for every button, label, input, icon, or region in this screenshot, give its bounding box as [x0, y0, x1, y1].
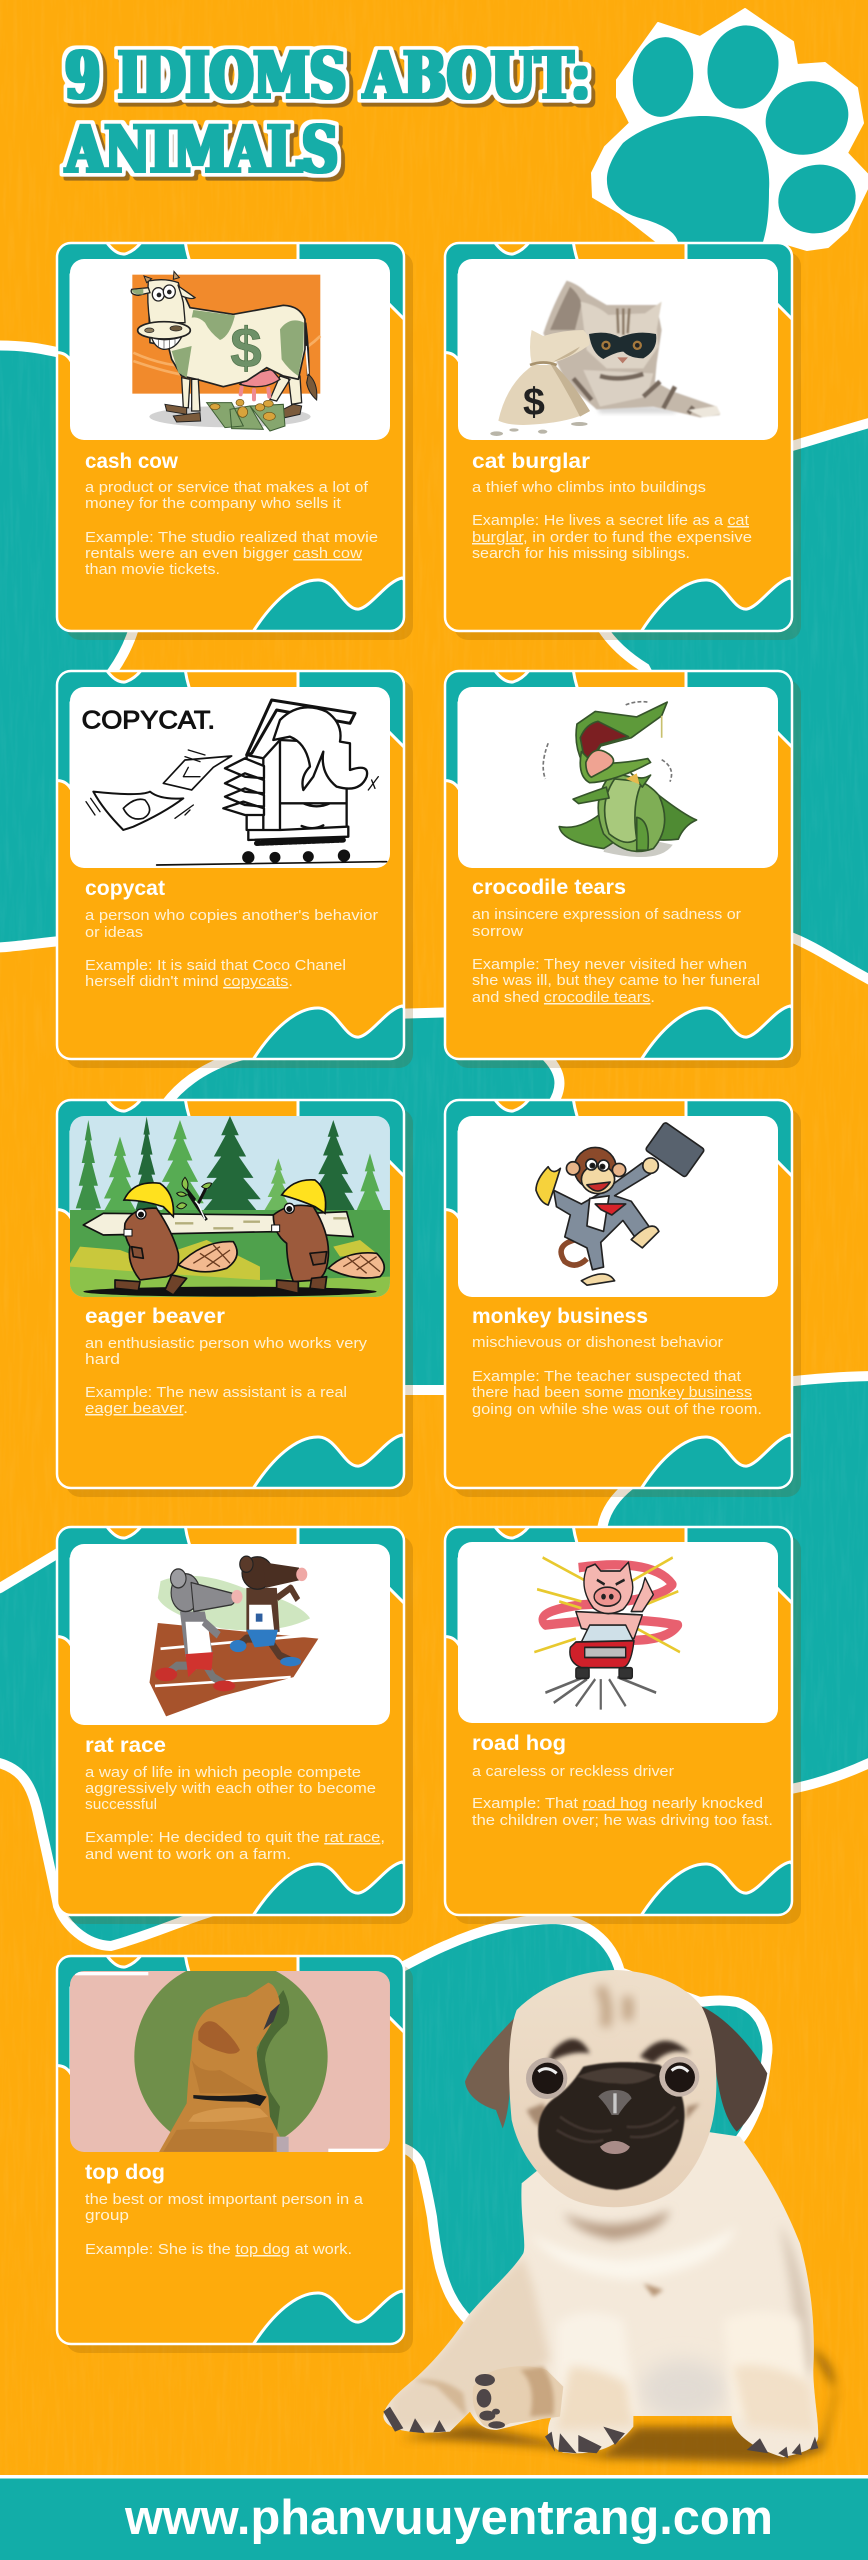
definition and example [85, 479, 378, 578]
image area [458, 687, 778, 868]
definition and example [472, 906, 760, 1006]
panel: top dog [54, 1953, 413, 2353]
definition and example: Example: The studio realized that movie [85, 529, 378, 546]
definition and example: aggressively with each other to become [85, 1780, 376, 1797]
panel: cat burglar [442, 240, 801, 640]
illustration: monkey with briefcase [536, 1122, 705, 1285]
card frame [442, 240, 801, 640]
definition and example: a product or service that makes a lot of [85, 479, 369, 496]
definition and example: hard [85, 1351, 120, 1368]
definition and example: eager beaver . [85, 1400, 188, 1417]
pug right ear [698, 2005, 767, 2132]
card frame [54, 1953, 413, 2353]
card frame [54, 1097, 413, 1497]
panel: monkey business [442, 1097, 801, 1497]
definition and example: group [85, 2207, 129, 2224]
image area [458, 259, 778, 440]
blob: behind pug [400, 1919, 767, 2322]
card frame [54, 668, 413, 1068]
pug mouth [600, 2141, 630, 2154]
illustration: dog looking up [70, 1960, 390, 2154]
definition and example [85, 907, 378, 990]
title line 2: ANIMALS [65, 112, 338, 188]
definition and example: an insincere expression of sadness or [472, 906, 741, 923]
definition and example: than movie tickets. [85, 561, 220, 578]
definition and example: there had been some monkey business [472, 1384, 752, 1401]
blob: lower right [602, 1376, 868, 1790]
definition and example [472, 1763, 773, 1829]
icon: paw print [592, 9, 868, 250]
definition and example: or ideas [85, 924, 143, 941]
definition and example: successful [85, 1796, 157, 1813]
image area [70, 687, 390, 868]
paw white outline [592, 9, 868, 250]
image area [70, 1544, 390, 1725]
background teal blobs [0, 345, 868, 2322]
website URL: www.phanvuuyentrang.com [124, 2491, 773, 2545]
definition and example: a thief who climbs into buildings [472, 479, 706, 496]
definition and example: going on while she was out of the room. [472, 1401, 762, 1418]
pug hind foot [473, 2366, 563, 2429]
image area [70, 259, 390, 440]
image area [458, 1542, 778, 1723]
card frame [54, 1524, 413, 1924]
pug shadow [400, 2347, 837, 2463]
panel: crocodile tears [442, 668, 801, 1068]
heading: cash cow: cash cow [85, 450, 179, 473]
definition and example: the children over; he was driving too fast. [472, 1812, 773, 1829]
image area [458, 1116, 778, 1297]
heading: monkey business: monkey business [472, 1305, 648, 1328]
title [65, 38, 590, 188]
heading: cat burglar: cat burglar [472, 450, 590, 473]
definition and example: Example: It is said that Coco Chanel [85, 957, 346, 974]
footer band [0, 2475, 868, 2560]
paw main pad [607, 116, 769, 242]
definition and example: Example: That road hog nearly knocked [472, 1795, 763, 1812]
definition and example: she was ill, but they came to her funeral [472, 972, 760, 989]
card frame [442, 1097, 801, 1497]
pug left ear [465, 2008, 527, 2128]
title line 1: 9 IDIOMS ABOUT: [65, 38, 590, 114]
definition and example [472, 479, 752, 562]
panel: road hog [442, 1524, 801, 1924]
card frame [442, 668, 801, 1068]
heading: eager beaver: eager beaver [85, 1305, 225, 1328]
pug muzzle [538, 2062, 685, 2190]
definition and example [472, 1334, 762, 1418]
blob: lower left [0, 1552, 210, 1946]
panel: eager beaver [54, 1097, 413, 1497]
definition and example: Example: The new assistant is a real [85, 1384, 347, 1401]
paw toes [628, 17, 863, 242]
definition and example: sorrow [472, 923, 523, 940]
illustration: cat on photocopier [82, 700, 387, 865]
definition and example: a person who copies another's behavior [85, 907, 378, 924]
definition and example: rentals were an even bigger cash cow [85, 545, 362, 562]
blob: upper right [590, 420, 868, 985]
definition and example: Example: The teacher suspected that [472, 1368, 742, 1385]
definition and example: a way of life in which people compete [85, 1764, 361, 1781]
illustration: cow: $ [230, 318, 262, 381]
pug head [509, 1970, 716, 2207]
illustration: pig driving a car [534, 1557, 680, 1710]
definition and example: Example: He lives a secret life as a cat [472, 512, 750, 529]
heading: rat race: rat race [85, 1734, 166, 1757]
pug nails [383, 2407, 818, 2458]
definition and example: and shed crocodile tears . [472, 989, 655, 1006]
definition and example: burglar , in order to fund the expensive [472, 529, 752, 546]
definition and example: Example: She is the top dog at work. [85, 2241, 352, 2258]
illustration: beavers carrying a log [70, 1116, 392, 1297]
illustration: cat on photocopier: COPYCAT. [82, 708, 215, 735]
definition and example: an enthusiastic person who works very [85, 1335, 368, 1352]
definition and example: Example: They never visited her when [472, 956, 747, 973]
card frame [54, 240, 413, 640]
definition and example: Example: He decided to quit the rat race , [85, 1829, 385, 1846]
definition and example [85, 1335, 368, 1417]
definition and example: the best or most important person in a [85, 2191, 364, 2208]
definition and example: herself didn't mind copycats . [85, 973, 293, 990]
panel: rat race [54, 1524, 413, 1924]
definition and example: a careless or reckless driver [472, 1763, 674, 1780]
pug body [383, 2117, 818, 2457]
blob: upper left [0, 345, 140, 948]
illustration: cow [131, 271, 320, 431]
heading: crocodile tears: crocodile tears [472, 876, 626, 899]
heading: road hog: road hog [472, 1732, 566, 1755]
blob: centre [165, 1012, 559, 1390]
definition and example: mischievous or dishonest behavior [472, 1334, 723, 1351]
panel: copycat [54, 668, 413, 1068]
definition and example [85, 1764, 385, 1863]
illustration: rats running on a track [149, 1556, 318, 1716]
definition and example: search for his missing siblings. [472, 545, 690, 562]
illustration: masked cat with money bag: $ [523, 380, 545, 424]
pug nose [598, 2090, 632, 2115]
panel: cash cow [54, 240, 413, 640]
illustration: pug puppy [383, 1970, 837, 2463]
definition and example: money for the company who sells it [85, 495, 342, 512]
illustration: crying crocodile [543, 702, 697, 857]
card frame [442, 1524, 801, 1924]
heading: top dog: top dog [85, 2161, 165, 2184]
illustration: masked cat with money bag [490, 281, 721, 436]
pug eyes [526, 2058, 567, 2099]
heading: copycat: copycat [85, 877, 165, 900]
definition and example: and went to work on a farm. [85, 1846, 291, 1863]
definition and example [85, 2191, 364, 2258]
